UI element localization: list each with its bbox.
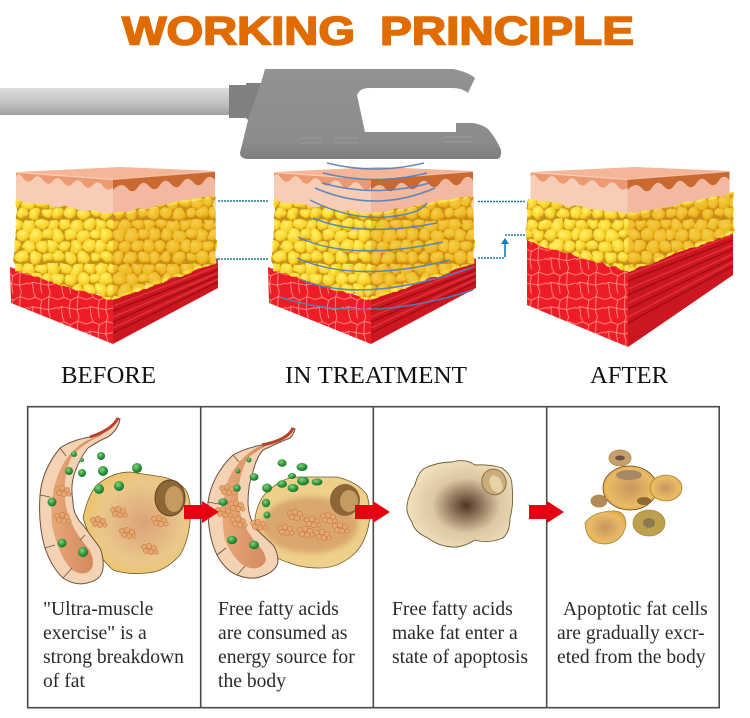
waves: electromagnetic field arcs bbox=[280, 163, 473, 309]
panel: before tissue block bbox=[10, 167, 218, 344]
text: step 4: Apoptotic fat cells bbox=[563, 599, 708, 620]
text: step 1: strong breakdown bbox=[43, 647, 184, 668]
title: PRINCIPLE bbox=[380, 10, 634, 54]
panel: step 1 illustration bbox=[40, 418, 191, 584]
label: after: AFTER bbox=[590, 362, 669, 389]
text: step 3: Free fatty acids bbox=[392, 599, 513, 620]
text: step 1: of fat bbox=[43, 671, 85, 692]
text: step 2: the body bbox=[218, 671, 286, 692]
arrow: step 2 to 3 bbox=[355, 501, 390, 523]
arrow: step 3 to 4 bbox=[529, 501, 564, 523]
text: step 4: are gradually excr- bbox=[557, 623, 705, 644]
icon: handpiece device bbox=[0, 69, 501, 159]
text: step 3: make fat enter a bbox=[392, 623, 518, 644]
panel: after tissue block bbox=[527, 167, 734, 347]
table frame bbox=[28, 407, 719, 708]
text: step 4: eted from the body bbox=[557, 647, 706, 668]
arrow: step 1 to 2 bbox=[184, 501, 219, 523]
text: step 1 bbox=[43, 599, 184, 692]
panel: in treatment tissue block bbox=[268, 163, 476, 344]
title bbox=[122, 10, 634, 54]
text: step 2: Free fatty acids bbox=[218, 599, 339, 620]
label: before: BEFORE bbox=[61, 362, 156, 389]
text: step 2 bbox=[218, 599, 355, 692]
connectors: dotted guide lines and arrow bbox=[218, 201, 525, 259]
text: step 2: energy source for bbox=[218, 647, 355, 668]
label: in treatment: IN TREATMENT bbox=[285, 362, 467, 389]
text: step 4 bbox=[557, 599, 708, 668]
text: step 2: are consumed as bbox=[218, 623, 347, 644]
text: step 1: "Ultra-muscle bbox=[43, 599, 154, 620]
text: step 1: exercise" is a bbox=[43, 623, 147, 644]
panel: step 2 illustration bbox=[208, 428, 370, 578]
text: step 3 bbox=[392, 599, 528, 668]
title: WORKING bbox=[122, 10, 355, 54]
panel: step 3 illustration bbox=[407, 461, 513, 547]
panel: step 4 illustration bbox=[585, 450, 682, 544]
text: step 3: state of apoptosis bbox=[392, 647, 528, 668]
